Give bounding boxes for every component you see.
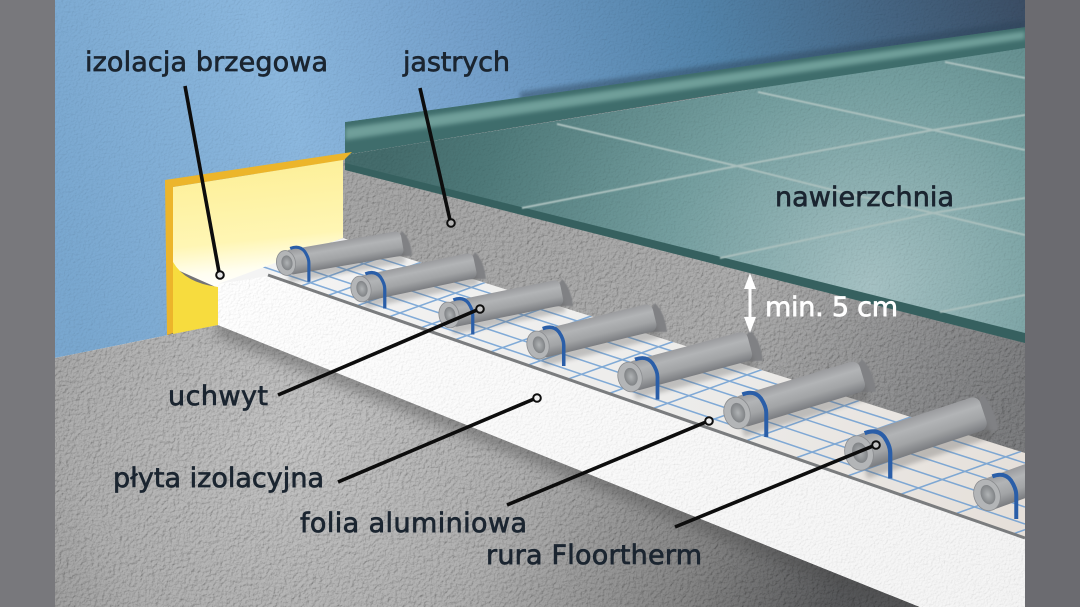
edge insulation strip (yellow)	[165, 152, 352, 335]
grid lines	[263, 242, 1025, 534]
leader: rura Floortherm	[675, 441, 880, 527]
leader: plyta izolacyjna	[338, 394, 541, 482]
label: uchwyt: uchwyt	[168, 381, 268, 412]
foil front edge	[268, 275, 1025, 538]
pipe 3	[437, 279, 573, 337]
label: folia aluminiowa: folia aluminiowa	[300, 508, 527, 539]
label: plyta izolacyjna: płyta izolacyjna	[113, 463, 324, 494]
screed layer (jastrych)	[343, 160, 1025, 460]
leader: folia aluminiowa	[507, 417, 713, 505]
shadow along the board on the floor	[218, 325, 920, 607]
aluminium foil with blue grid	[220, 238, 1025, 540]
skirting board	[345, 27, 1025, 155]
floor covering tiles	[345, 45, 1025, 343]
label: rura Floortherm: rura Floortherm	[486, 540, 702, 571]
leader: izolacja brzegowa	[185, 86, 224, 279]
left grey bar	[0, 0, 55, 607]
wall shadow above skirting	[520, 20, 1025, 102]
leader: uchwyt	[278, 305, 484, 395]
pipe 2	[349, 252, 486, 311]
pipe 8	[969, 459, 1049, 519]
label: jastrych: jastrych	[402, 47, 510, 78]
insulation board (white)	[218, 274, 1025, 607]
leader: jastrych	[420, 88, 455, 227]
blue wall	[55, 0, 1025, 359]
floor base	[55, 325, 920, 607]
tile grout lines	[522, 62, 1025, 312]
pipe 5	[615, 330, 763, 402]
pipe 7	[840, 395, 998, 483]
pale inner face	[173, 160, 343, 288]
label: min. 5 cm: min. 5 cm	[765, 292, 898, 323]
pipe 6	[720, 359, 876, 441]
right grey bar	[1025, 0, 1080, 607]
tile front edge	[345, 163, 1025, 343]
yellow outer strip	[165, 152, 352, 335]
pipe 4	[524, 303, 667, 369]
bright yellow lower section	[173, 262, 218, 334]
arrow: minimum height	[744, 273, 756, 333]
label: nawierzchnia: nawierzchnia	[775, 182, 954, 213]
skirting highlight band	[345, 31, 1025, 140]
pipe 1	[275, 231, 412, 284]
label: izolacja brzegowa: izolacja brzegowa	[85, 47, 328, 78]
